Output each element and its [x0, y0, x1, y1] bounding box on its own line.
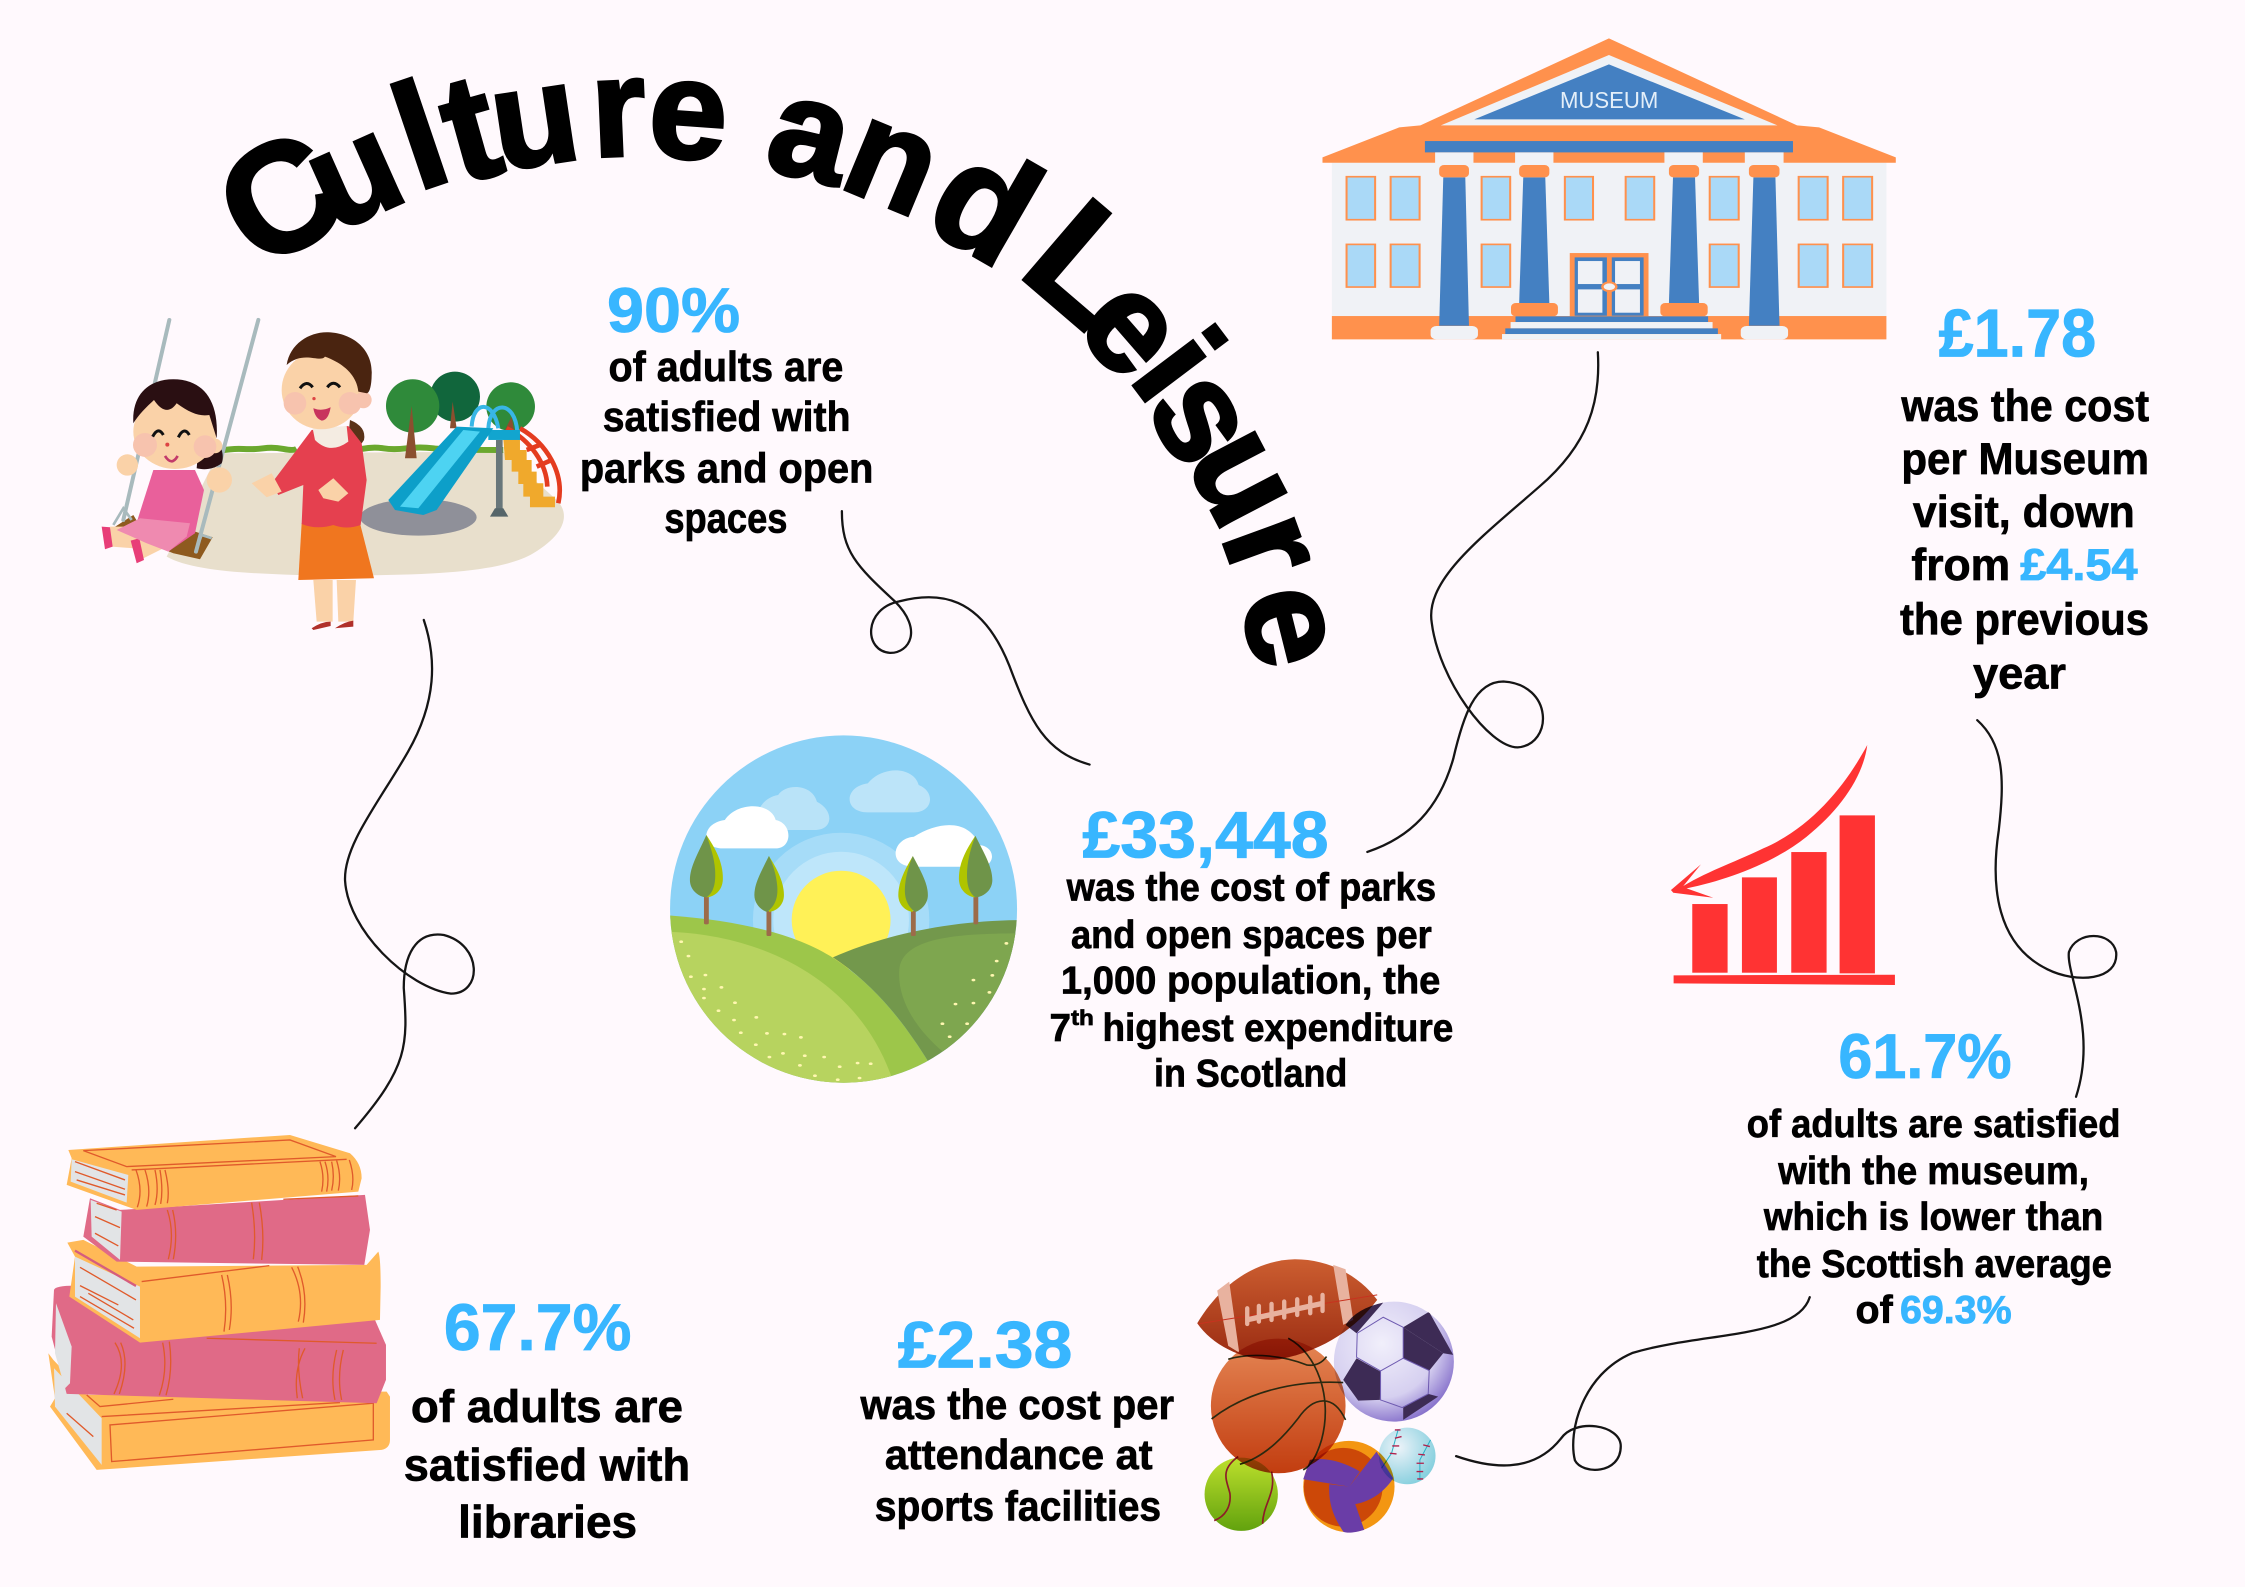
title: e: [1210, 568, 1381, 681]
stat: 61.7% satisfied with museum: 69.3%: [1900, 1288, 2012, 1332]
stat: 90% adults satisfied with parks: satisfied with: [603, 393, 850, 440]
stat: 61.7% satisfied with museum: which is lower than: [1763, 1195, 2103, 1239]
title: u: [282, 82, 424, 260]
volleyball: [1303, 1441, 1395, 1533]
soccer ball: [1334, 1302, 1454, 1422]
icon: museum building: [1322, 38, 1896, 339]
bottom book: [48, 1353, 390, 1470]
stat: 90% adults satisfied with parks: [580, 276, 873, 542]
icon: red declining bar chart with arrow: [1671, 745, 1895, 985]
title: i: [1104, 301, 1253, 427]
trees: [690, 835, 992, 936]
stat: £2.38 per sports attendance: sports facilities: [875, 1483, 1161, 1530]
stat: 67.7% satisfied with libraries: satisfied with: [404, 1439, 690, 1490]
stat: 90% adults satisfied with parks: of adults are: [608, 343, 843, 390]
icon: sports balls: [1197, 1259, 1454, 1533]
stat: 61.7% satisfied with museum: with the museum,: [1777, 1149, 2089, 1193]
connector: museum to cost stat: [1367, 352, 1598, 852]
pink upper book: [83, 1195, 370, 1265]
icon: park landscape circle: [664, 730, 1023, 1090]
baseball: [1379, 1428, 1436, 1484]
tennis ball: [1205, 1457, 1278, 1531]
stat: 67.7% satisfied with libraries: [404, 1290, 690, 1548]
title: t: [423, 40, 516, 215]
stat: £33,448 cost of parks: [1049, 798, 1453, 1096]
orange book: [67, 1240, 381, 1343]
stat: £2.38 per sports attendance: attendance at: [885, 1431, 1153, 1478]
title: n: [825, 68, 964, 246]
stat: £2.38 per sports attendance: [860, 1307, 1174, 1530]
title: u: [1158, 400, 1337, 549]
icon: stack of books: [48, 1135, 390, 1470]
stat: 67.7% satisfied with libraries: libraries: [458, 1497, 637, 1548]
title: L: [995, 167, 1179, 360]
stat: £1.78 per museum visit: from: [1911, 541, 2010, 590]
title: u: [480, 32, 588, 200]
stat: £33,448 cost of parks: in Scotland: [1154, 1052, 1347, 1096]
icon: playground with woman and child: [102, 320, 564, 630]
stat: £1.78 per museum visit: was the cost: [1900, 382, 2149, 431]
stat: £2.38 per sports attendance: £2.38: [898, 1307, 1072, 1381]
stat: £33,448 cost of parks: was the cost of parks: [1066, 866, 1436, 910]
title: a: [755, 45, 869, 216]
stat: 61.7% satisfied with museum: of: [1856, 1288, 1894, 1332]
stat: 90% adults satisfied with parks: parks and open: [580, 445, 873, 492]
title: s: [1118, 342, 1293, 488]
stat: £1.78 per museum visit: [1900, 297, 2149, 699]
stat: £33,448 cost of parks: th: [1071, 1006, 1094, 1030]
title: r: [588, 28, 649, 187]
stat: £33,448 cost of parks: highest expenditure: [1102, 1006, 1453, 1050]
stat: £1.78 per museum visit: £4.54: [2020, 541, 2138, 590]
stat: 67.7% satisfied with libraries: of adults are: [411, 1381, 683, 1432]
title: r: [1192, 492, 1359, 597]
stat: £1.78 per museum visit: visit, down: [1913, 488, 2135, 537]
stat: 61.7% satisfied with museum: [1747, 1022, 2120, 1332]
stat: £1.78 per museum visit: year: [1973, 650, 2066, 699]
stat: £33,448 cost of parks: and open spaces per: [1071, 913, 1432, 957]
stat: £1.78 per museum visit: the previous: [1900, 595, 2149, 644]
basketball: [1211, 1338, 1346, 1473]
stat: 90% adults satisfied with parks: spaces: [664, 495, 787, 542]
stat: 61.7% satisfied with museum: of adults are satisfied: [1747, 1102, 2120, 1146]
stat: £1.78 per museum visit: £1.78: [1939, 297, 2096, 372]
stat: £33,448 cost of parks: 7: [1049, 1006, 1071, 1050]
stat: 67.7% satisfied with libraries: 67.7%: [444, 1290, 631, 1364]
connector: parks stat to cost stat: [842, 511, 1090, 765]
title: C: [188, 95, 373, 301]
pink book: [52, 1286, 386, 1403]
stat: £2.38 per sports attendance: was the cost per: [860, 1381, 1174, 1428]
connector: satisfaction to sports: [1456, 1297, 1810, 1470]
connector: playground to books: [345, 620, 474, 1128]
top book: [67, 1135, 362, 1210]
title: e: [644, 29, 733, 191]
museum label: MUSEUM: [1560, 88, 1658, 113]
stat: £33,448 cost of parks: 1,000 population, the: [1061, 959, 1440, 1003]
stat: 61.7% satisfied with museum: the Scottish average: [1757, 1242, 2112, 1286]
connector: museum cost to satisfaction: [1977, 720, 2116, 1097]
stat: £1.78 per museum visit: per Museum: [1901, 435, 2149, 484]
stat: £33,448 cost of parks: £33,448: [1082, 798, 1329, 872]
stat: 90% adults satisfied with parks: 90%: [607, 276, 740, 346]
title: l: [373, 49, 467, 222]
title: d: [904, 107, 1068, 298]
stat: 61.7% satisfied with museum: 61.7%: [1838, 1022, 2012, 1092]
child on swing: [102, 379, 232, 563]
american football: [1197, 1259, 1377, 1360]
title: e: [1050, 244, 1220, 406]
woman: [252, 332, 374, 630]
